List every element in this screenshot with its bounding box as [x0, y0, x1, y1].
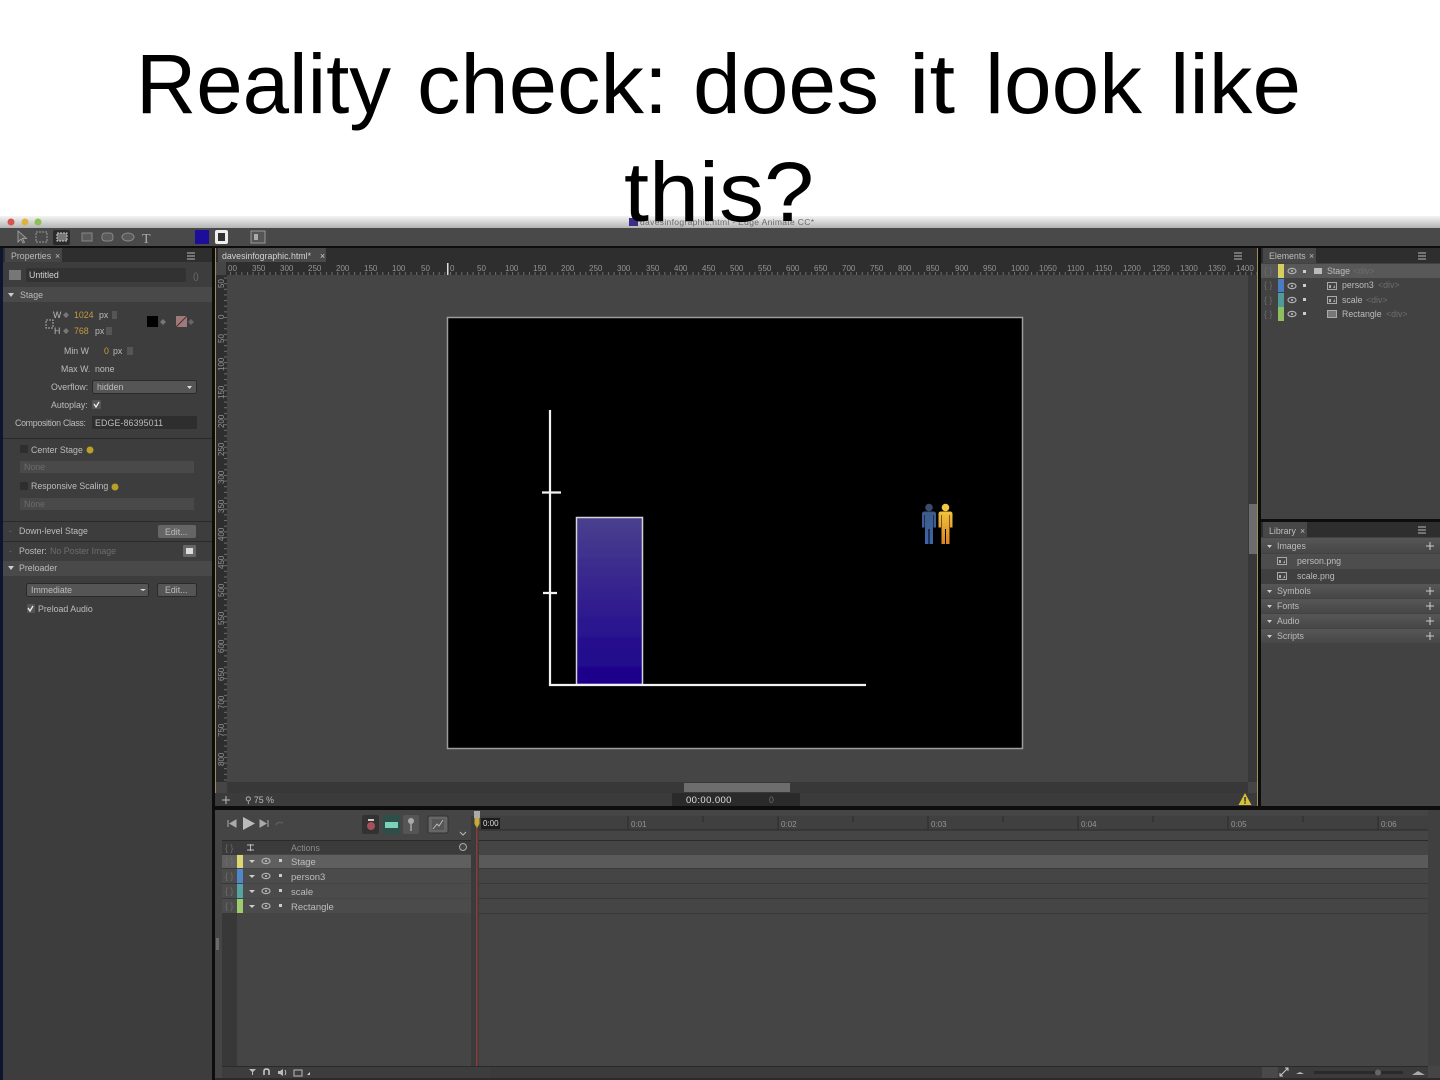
min and max width: Min W: [64, 346, 90, 356]
element row: rectangle: <div>: [1386, 309, 1408, 319]
horizontal ruler: 1050: [1039, 264, 1057, 273]
horizontal ruler: 900: [955, 264, 969, 273]
min and max width: Max W.: [61, 364, 90, 374]
document tab: ×: [320, 251, 325, 261]
element row: scale: scale: [1342, 295, 1363, 305]
composition stage: [448, 318, 1022, 748]
horizontal ruler: 200: [336, 264, 350, 273]
stage status bar: 00:00.000: [686, 795, 732, 806]
min and max width: [61, 346, 133, 374]
horizontal ruler: 1350: [1208, 264, 1226, 273]
layer row: stage: { }: [225, 856, 233, 866]
timeline footer right: zoom slider: [490, 1067, 1428, 1078]
element row: scale: [1264, 293, 1388, 307]
vertical ruler: 400: [217, 527, 226, 541]
stage status bar: 0: [769, 795, 774, 805]
time ruler: 0:01: [631, 820, 647, 829]
layer row: rectangle: { }: [225, 901, 233, 911]
vertical ruler: 300: [217, 470, 226, 484]
chart axes: [542, 410, 866, 685]
playhead: 0:00: [483, 819, 499, 828]
bar chart: [542, 410, 866, 685]
section header: preloader: Preloader: [19, 563, 57, 573]
document tab: davesinfographic.html*: [222, 251, 311, 261]
warning icon: [1238, 793, 1252, 805]
vertical ruler: [215, 248, 227, 806]
poster row: No Poster Image: [50, 546, 116, 556]
timeline footer left: [222, 1066, 1428, 1078]
elements tab label: ×: [1309, 251, 1314, 261]
horizontal ruler: 1150: [1095, 264, 1113, 273]
actions header: Actions: [291, 843, 320, 853]
stage size fields: [46, 310, 194, 336]
title: Reality: [136, 37, 391, 131]
title: does: [693, 37, 879, 131]
horizontal ruler: 200: [561, 264, 575, 273]
properties tab label: ×: [55, 251, 60, 261]
element row: rectangle: Rectangle: [1342, 309, 1382, 319]
stage size fields: W: [53, 310, 62, 320]
title: look: [985, 37, 1143, 131]
horizontal ruler: 1400: [1236, 264, 1254, 273]
overflow dropdown: Overflow:: [51, 382, 88, 392]
composition name row: Untitled: [29, 270, 59, 280]
vertical ruler: 0: [217, 314, 226, 319]
composition name row: (): [193, 271, 199, 281]
responsive scaling option: [20, 481, 194, 510]
element row: rectangle: { }: [1264, 309, 1272, 319]
vertical scrollbar: [1248, 275, 1257, 782]
element row: person3: <div>: [1378, 280, 1400, 290]
playback controls: [228, 817, 283, 830]
responsive scaling option: None: [24, 499, 45, 509]
composition class field: Composition Class:: [15, 418, 86, 428]
panel: stage document: [215, 248, 1258, 806]
horizontal ruler: [226, 262, 1258, 275]
title: check:: [417, 37, 668, 131]
down-level stage row: [9, 525, 196, 538]
library section: fonts: [1261, 599, 1440, 613]
composition name row: [3, 262, 212, 286]
section header: preloader: [3, 561, 212, 576]
element row: stage: Stage: [1327, 266, 1350, 276]
timeline tool buttons: [362, 815, 466, 835]
element row: stage: [1261, 264, 1440, 278]
horizontal ruler: 50: [421, 264, 430, 273]
library section: images: person.png: [1297, 556, 1341, 566]
center stage option: Center Stage: [31, 445, 83, 455]
composition class field: EDGE-86395011: [95, 418, 163, 428]
layer row: rectangle: Rectangle: [291, 902, 334, 913]
horizontal ruler: 450: [702, 264, 716, 273]
horizontal ruler: 350: [252, 264, 266, 273]
vertical ruler: 450: [217, 555, 226, 569]
title: this?: [624, 145, 814, 239]
horizontal ruler: 100: [392, 264, 406, 273]
poster row: -: [9, 546, 12, 556]
panel: timeline: [215, 810, 1440, 1080]
library tab label: Library: [1269, 526, 1296, 536]
library section: fonts: Fonts: [1277, 601, 1300, 611]
document tab: [218, 248, 326, 262]
layer row: scale: scale: [291, 887, 313, 898]
stage size fields: H: [54, 326, 60, 336]
vertical ruler: 600: [217, 639, 226, 653]
layer row: person3: { }: [225, 871, 233, 881]
horizontal ruler: 100: [505, 264, 519, 273]
horizontal ruler: 400: [674, 264, 688, 273]
layer row: rectangle: [222, 899, 471, 913]
element row: stage: <div>: [1353, 266, 1375, 276]
vertical ruler: 550: [217, 611, 226, 625]
overflow dropdown: [51, 380, 196, 394]
vertical ruler: 800: [217, 752, 226, 766]
horizontal ruler: 150: [533, 264, 547, 273]
gutters between panels: [215, 248, 1440, 810]
horizontal ruler: 1250: [1152, 264, 1170, 273]
elements tab label: Elements: [1269, 251, 1306, 261]
down-level stage row: Edit...: [165, 527, 188, 537]
element row: rectangle: [1264, 307, 1408, 321]
layer row: scale: { }: [225, 886, 233, 896]
min and max width: px: [113, 346, 123, 356]
horizontal ruler: 950: [983, 264, 997, 273]
horizontal ruler: 350: [646, 264, 660, 273]
horizontal ruler: 600: [786, 264, 800, 273]
vertical ruler: 750: [217, 723, 226, 737]
stage status bar: [215, 793, 1258, 806]
vertical ruler: 50: [217, 334, 226, 343]
library section: scripts: Scripts: [1277, 631, 1304, 641]
icon: yellow person: [938, 504, 952, 544]
window title bar: davesinfographic.html - Edge Animate CC*: [640, 217, 815, 227]
panel: library: [1261, 522, 1440, 806]
title: it: [909, 37, 955, 131]
min and max width: none: [95, 364, 115, 374]
horizontal ruler: 250: [308, 264, 322, 273]
horizontal ruler: 1200: [1123, 264, 1141, 273]
title: like: [1170, 37, 1301, 131]
horizontal ruler: 700: [842, 264, 856, 273]
element row: person3: [1264, 279, 1400, 292]
window title bar: [0, 216, 1440, 228]
horizontal ruler: 500: [730, 264, 744, 273]
layer row: scale: [222, 884, 471, 898]
properties tab label: Properties: [11, 251, 51, 261]
playhead: [474, 811, 500, 1066]
horizontal ruler: 1300: [1180, 264, 1198, 273]
preloader settings: [26, 584, 196, 614]
stage status bar: ⚲ 75 %: [245, 795, 274, 805]
min and max width: 0: [104, 346, 109, 356]
horizontal ruler: 1100: [1067, 264, 1085, 273]
library section: images: Images: [1277, 541, 1306, 551]
time ruler: 0:03: [931, 820, 947, 829]
vertical ruler: 650: [217, 667, 226, 681]
horizontal ruler: 650: [814, 264, 828, 273]
horizontal ruler: 800: [898, 264, 912, 273]
chart bar: [576, 518, 642, 684]
horizontal ruler: 750: [870, 264, 884, 273]
overflow dropdown: hidden: [97, 382, 124, 392]
layer row: person3: [222, 869, 471, 883]
time ruler: 0:02: [781, 820, 797, 829]
stage size fields: 768: [74, 326, 89, 336]
horizontal ruler: 50: [477, 264, 486, 273]
down-level stage row: Down-level Stage: [19, 526, 88, 536]
time ruler: [479, 816, 1428, 830]
stage size fields: px: [95, 326, 105, 336]
stage size fields: px: [99, 310, 109, 320]
time ruler: 0:04: [1081, 820, 1097, 829]
element row: stage: { }: [1264, 266, 1272, 276]
section header: stage: [3, 287, 212, 302]
library section: scripts: [1261, 629, 1440, 643]
poster row: [9, 545, 196, 557]
horizontal ruler: 300: [617, 264, 631, 273]
horizontal ruler: 1000: [1011, 264, 1029, 273]
element row: scale: <div>: [1366, 295, 1388, 305]
horizontal ruler: 250: [589, 264, 603, 273]
vertical ruler: 250: [217, 442, 226, 456]
stage size fields: 1024: [74, 310, 94, 320]
layer row: person3: person3: [291, 872, 325, 883]
layer row: stage: [222, 855, 471, 868]
preloader settings: Preload Audio: [38, 604, 93, 614]
horizontal ruler: 550: [758, 264, 772, 273]
vertical ruler: 50: [217, 279, 226, 288]
vertical ruler: 100: [217, 357, 226, 371]
section header: stage: Stage: [20, 290, 43, 300]
time ruler: 0:06: [1381, 820, 1397, 829]
toolbar: T: [142, 232, 151, 247]
icon: blue person: [922, 504, 936, 544]
library section: symbols: [1261, 584, 1440, 598]
layer row: stage: Stage: [291, 857, 316, 868]
vertical ruler: 350: [217, 499, 226, 513]
preloader settings: Edit...: [165, 585, 188, 595]
panel: elements: [1261, 248, 1440, 519]
element row: person3: person3: [1342, 280, 1374, 290]
library section: images: scale.png: [1297, 571, 1335, 581]
left desktop sliver: [0, 248, 3, 1080]
library section: images: [1261, 538, 1440, 584]
horizontal ruler: 850: [926, 264, 940, 273]
horizontal ruler: 0: [450, 264, 455, 273]
actions header: [222, 840, 1428, 854]
center stage option: None: [24, 462, 45, 472]
vertical ruler: 150: [217, 385, 226, 399]
panel: properties: [3, 248, 215, 1080]
vertical ruler: 700: [217, 695, 226, 709]
element row: scale: { }: [1264, 295, 1272, 305]
preloader settings: Immediate: [31, 585, 72, 595]
autoplay checkbox: Autoplay:: [51, 400, 88, 410]
title: [136, 37, 1301, 239]
app window screenshot: [0, 216, 1440, 1080]
horizontal ruler: 300: [280, 264, 294, 273]
library section: symbols: Symbols: [1277, 586, 1311, 596]
center stage option: [20, 445, 194, 473]
horizontal ruler: 150: [364, 264, 378, 273]
down-level stage row: -: [9, 526, 12, 536]
vertical ruler: 500: [217, 583, 226, 597]
horizontal ruler: 00: [228, 264, 237, 273]
library section: audio: Audio: [1277, 616, 1300, 626]
library tab label: ×: [1300, 526, 1305, 536]
timeline track rows: [479, 855, 1428, 914]
poster row: Poster:: [19, 546, 47, 556]
panel menu icon: [187, 253, 195, 259]
library section: audio: [1261, 614, 1440, 628]
actions header: { }: [225, 843, 233, 853]
element row: person3: { }: [1264, 280, 1272, 290]
vertical ruler: 200: [217, 414, 226, 428]
responsive scaling option: Responsive Scaling: [31, 481, 108, 491]
composition class field: [15, 416, 197, 429]
time ruler: 0:05: [1231, 820, 1247, 829]
horizontal scrollbar: [227, 782, 1248, 793]
toolbar: [0, 228, 1440, 248]
